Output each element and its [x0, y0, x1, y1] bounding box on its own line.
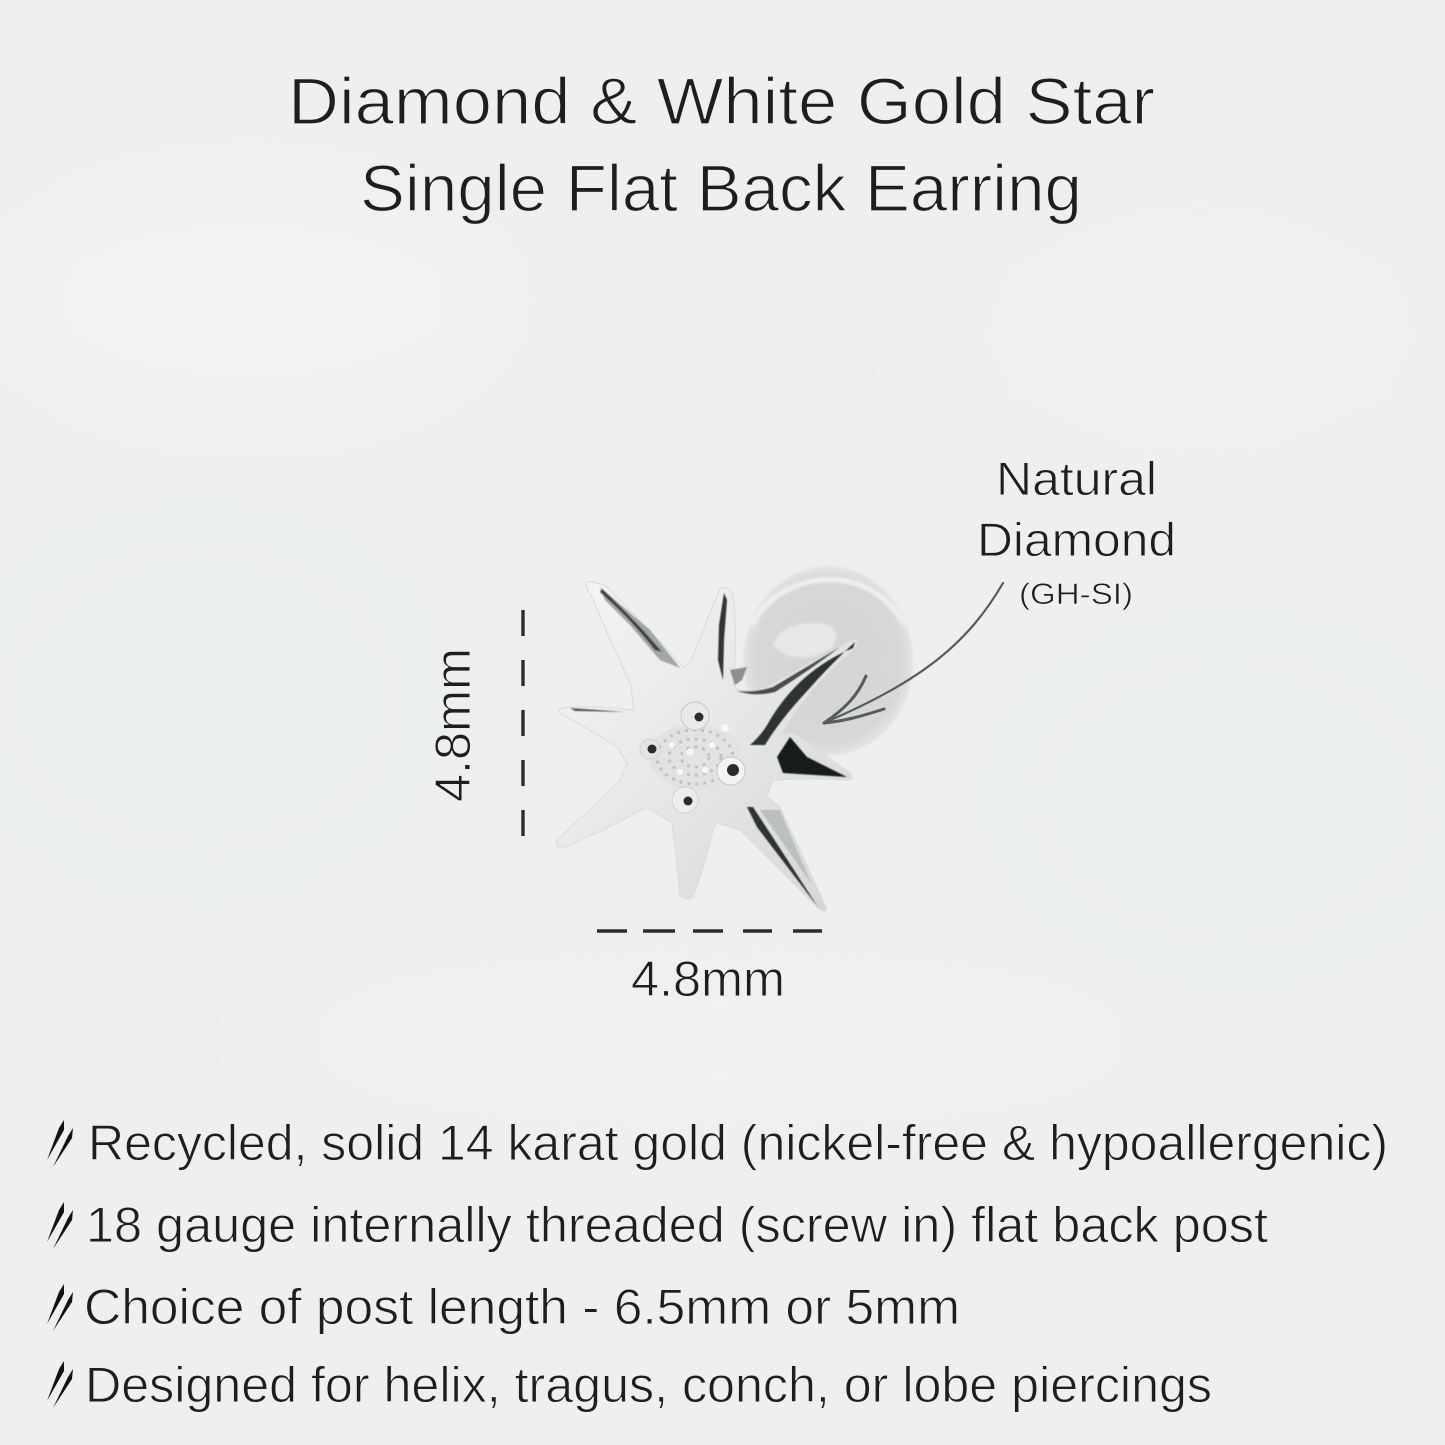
title: [288, 64, 1155, 225]
bullet text 3: Choice of post length - 6.5mm or 5mm: [84, 1279, 960, 1335]
prongs: [640, 702, 745, 813]
width dimension: dashed line: [597, 929, 822, 933]
height dimension: dashed line: [521, 610, 525, 836]
height label: 4.8mm: [425, 648, 481, 802]
callout: natural diamond: Diamond: [977, 513, 1176, 566]
callout: natural diamond: Natural: [996, 452, 1157, 505]
title: Diamond & White Gold Star: [288, 64, 1155, 138]
reflections on star rays: [570, 587, 855, 907]
bullet icon 2: [47, 1202, 73, 1249]
bullet text 1: Recycled, solid 14 karat gold (nickel-free & hypoallergenic): [88, 1115, 1388, 1171]
diamond stone: [649, 724, 741, 790]
earring photo illustration: [557, 566, 913, 911]
callout: natural diamond: (GH-SI): [1019, 578, 1133, 611]
title: Single Flat Back Earring: [360, 151, 1082, 225]
flat back disc: [743, 566, 913, 756]
threaded post: [773, 623, 836, 658]
width label: 4.8mm: [631, 951, 785, 1007]
bullet icon 3: [47, 1284, 73, 1331]
feature list: [47, 1115, 1388, 1413]
bullet icon 1: [47, 1120, 73, 1167]
callout: natural diamond: [977, 452, 1176, 611]
star body: [557, 582, 857, 911]
bullet icon 4: [47, 1361, 73, 1408]
arrow: points to diamond: [824, 583, 1003, 723]
bullet text 4: Designed for helix, tragus, conch, or lobe piercings: [85, 1357, 1212, 1413]
bullet text 2: 18 gauge internally threaded (screw in) flat back post: [86, 1197, 1268, 1253]
